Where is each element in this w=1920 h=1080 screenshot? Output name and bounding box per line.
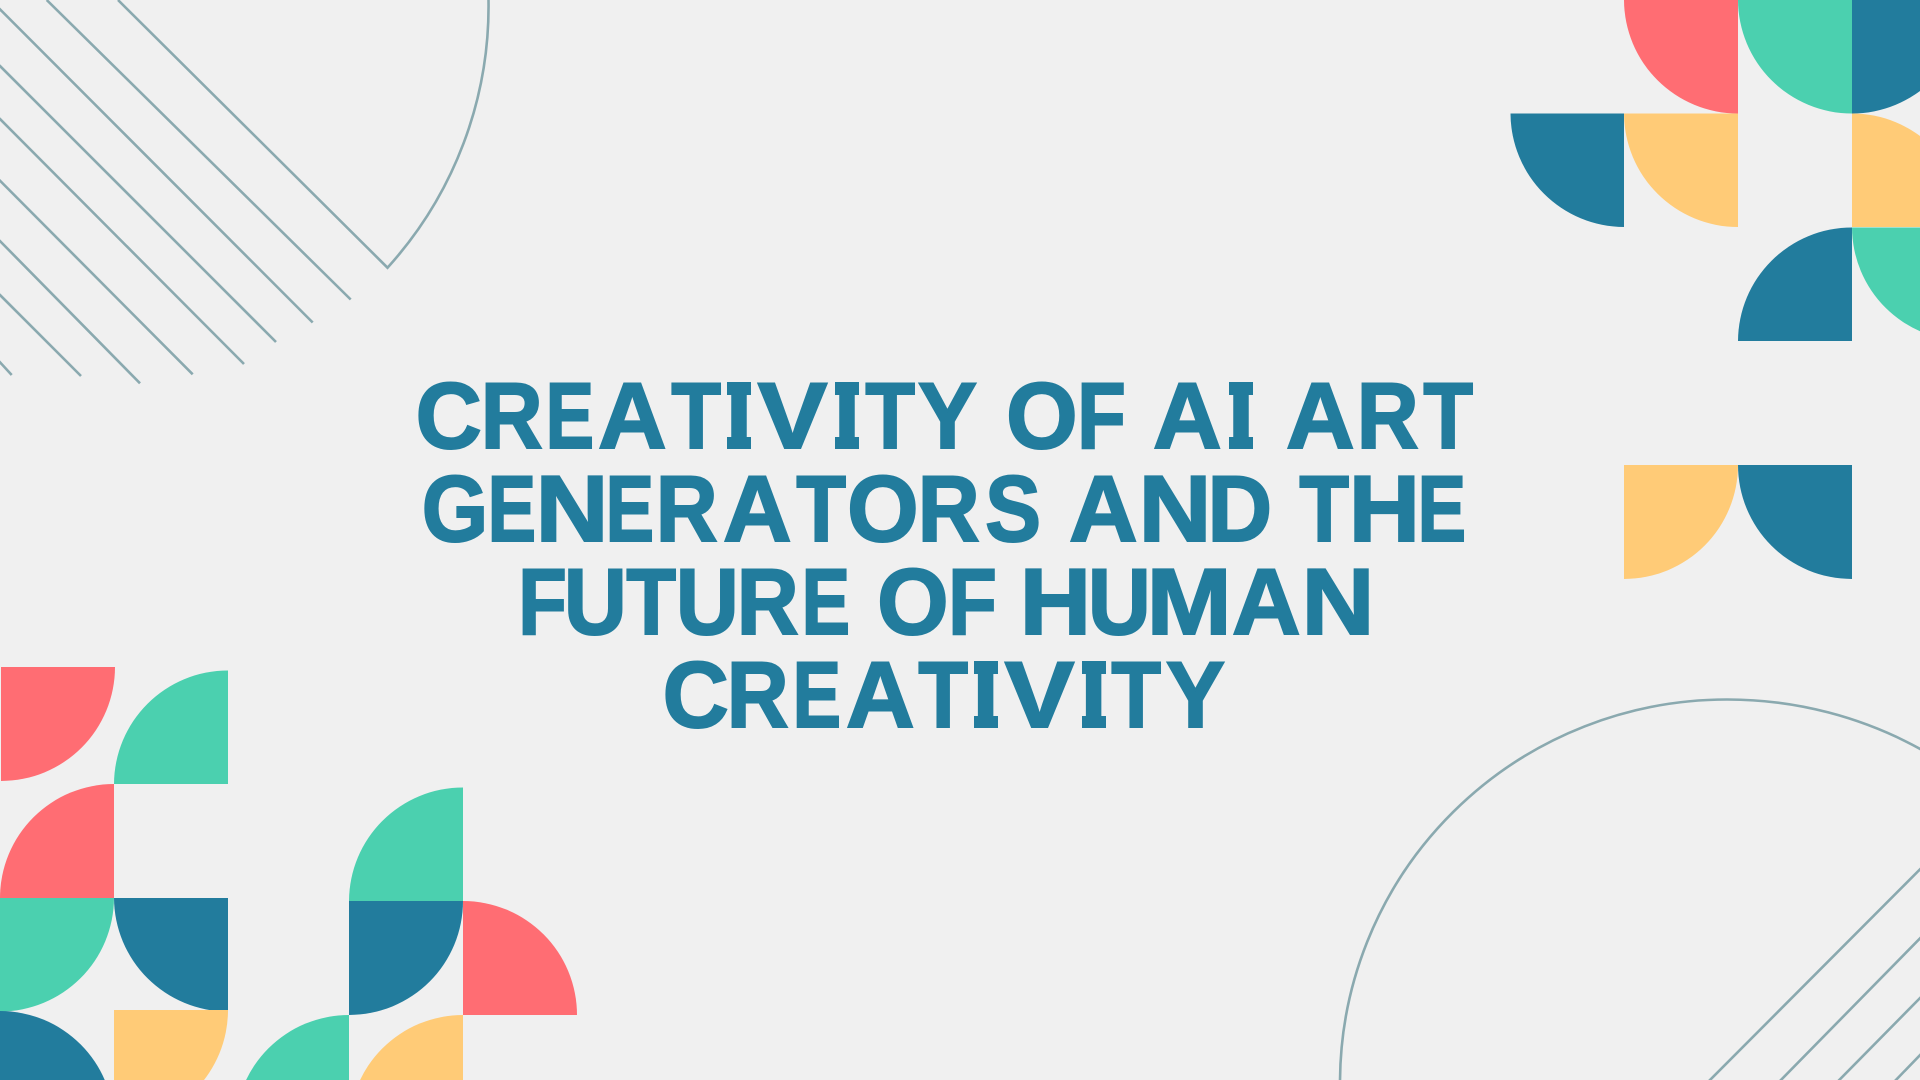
title line 4: Y [1166,642,1225,747]
geometric quarter circles: bottom centre-left cluster [235,788,577,1080]
title line 1: I [726,363,752,468]
title line 2: N [1139,456,1211,561]
title line 2: E [606,456,655,561]
title line 2: T [796,456,846,561]
title line 2: G [422,456,488,561]
title line 2: E [1418,456,1466,561]
title line 1: E [546,363,594,468]
title [416,363,1473,747]
title line 1: T [865,363,915,468]
title line 4: T [1112,642,1161,747]
title line 3: F [948,549,997,654]
title line 3: N [1301,549,1374,654]
title line 1: T [672,363,721,468]
title line 3: O [877,549,949,654]
title line 2: N [536,456,608,561]
title line 1: R [480,363,542,468]
title line 3: F [518,549,567,654]
title line 1 [416,363,1473,468]
geometric quarter circles: top right [1510,0,1920,341]
title line 1: O [1006,363,1078,468]
title line 4: E [792,642,841,747]
title line 4: C [663,642,729,747]
title line 4: T [919,642,968,747]
geometric quarter circles: middle right [1624,465,1852,579]
title line 2: D [1208,456,1272,561]
title line 2: O [848,456,919,561]
title line 1: I [834,363,860,468]
title line 3 [518,549,1374,654]
title line 1: A [1286,363,1355,468]
title line 2: A [723,456,792,561]
title line 4: I [1081,642,1107,747]
title line 1: R [1357,363,1419,468]
title line 3: T [627,549,676,654]
title line 3: M [1146,549,1231,654]
title line 2: R [918,456,980,561]
title line 2: A [1069,456,1138,561]
title line 1: V [758,363,827,468]
title line 2: T [1300,456,1349,561]
title line 1: A [1153,363,1222,468]
title line 1: I [1228,363,1254,468]
title line 3: U [1088,549,1151,654]
title line 2 [422,456,1466,561]
title line 4: V [1005,642,1074,747]
title line 4: I [973,642,999,747]
title line 2: R [655,456,717,561]
title line 1: Y [918,363,977,468]
title line 1: F [1077,363,1126,468]
title line 3: U [676,549,739,654]
title line 3: E [802,549,850,654]
title line 4: A [846,642,914,747]
title line 3: R [736,549,798,654]
decorative outline: bottom-right circle with diagonal lines [1340,699,1920,1080]
geometric quarter circles: bottom left column [0,667,228,1080]
title line 1: A [598,363,667,468]
title line 2: H [1349,456,1420,561]
title line 3: U [564,549,627,654]
title line 1: T [1423,363,1473,468]
title line 2: E [488,456,536,561]
title line 4 [663,642,1226,747]
title line 3: H [1019,549,1091,654]
title line 2: S [985,456,1041,561]
title line 3: A [1232,549,1301,654]
title line 1: C [416,363,482,468]
title line 4: R [727,642,789,747]
decorative outline: top-left sector with diagonal lines [0,0,489,383]
